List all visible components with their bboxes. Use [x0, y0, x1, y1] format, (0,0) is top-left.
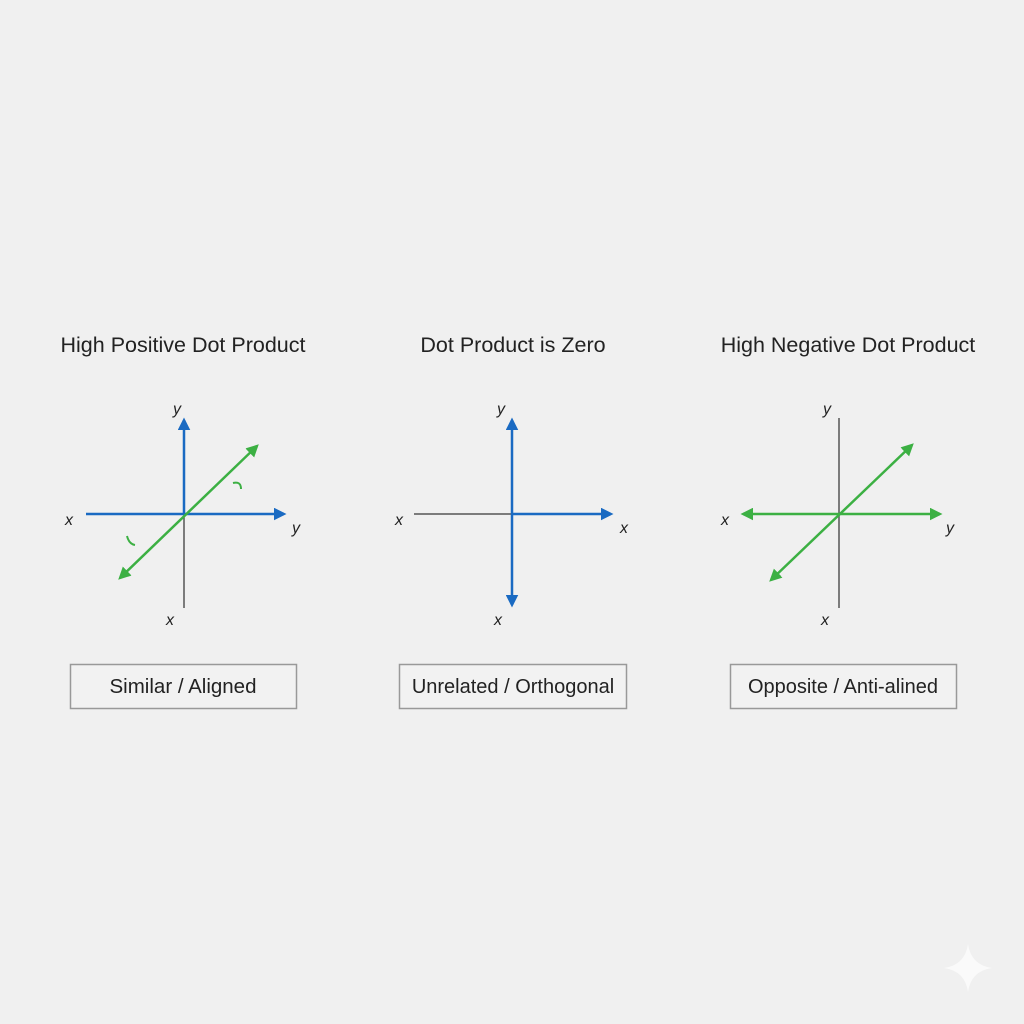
chart: orthogonal vectors [394, 401, 629, 629]
chart: aligned vectors [64, 401, 301, 629]
label box: unrelated [400, 664, 626, 708]
chart: opposite vectors: x [820, 612, 830, 629]
panel: high positive [61, 333, 306, 708]
chart: aligned vectors: x [165, 612, 175, 629]
label box: opposite: Opposite / Anti-alined [748, 676, 938, 698]
panel: zero [394, 333, 629, 708]
chart: aligned vectors: y [291, 520, 301, 537]
chart: opposite vectors: y [822, 401, 832, 418]
chart: orthogonal vectors: x [394, 512, 404, 529]
icon: sparkle [944, 944, 992, 992]
chart: opposite vectors: x [720, 512, 730, 529]
label box: opposite [730, 664, 956, 708]
chart: aligned vectors: x [64, 512, 74, 529]
title: high negative: High Negative Dot Product [721, 333, 975, 357]
label box: similar: Similar / Aligned [110, 675, 256, 698]
chart: opposite vectors [720, 401, 955, 629]
label box: unrelated: Unrelated / Orthogonal [412, 676, 614, 698]
chart: opposite vectors: y [945, 520, 955, 537]
panel: high negative [720, 333, 975, 708]
chart: orthogonal vectors: y [496, 401, 506, 418]
title: zero: Dot Product is Zero [420, 333, 606, 357]
chart: orthogonal vectors: x [493, 612, 503, 629]
title: high positive: High Positive Dot Product [61, 333, 306, 357]
chart: aligned vectors: y [172, 401, 182, 418]
chart: orthogonal vectors: x [619, 520, 629, 537]
label box: similar [70, 664, 296, 708]
